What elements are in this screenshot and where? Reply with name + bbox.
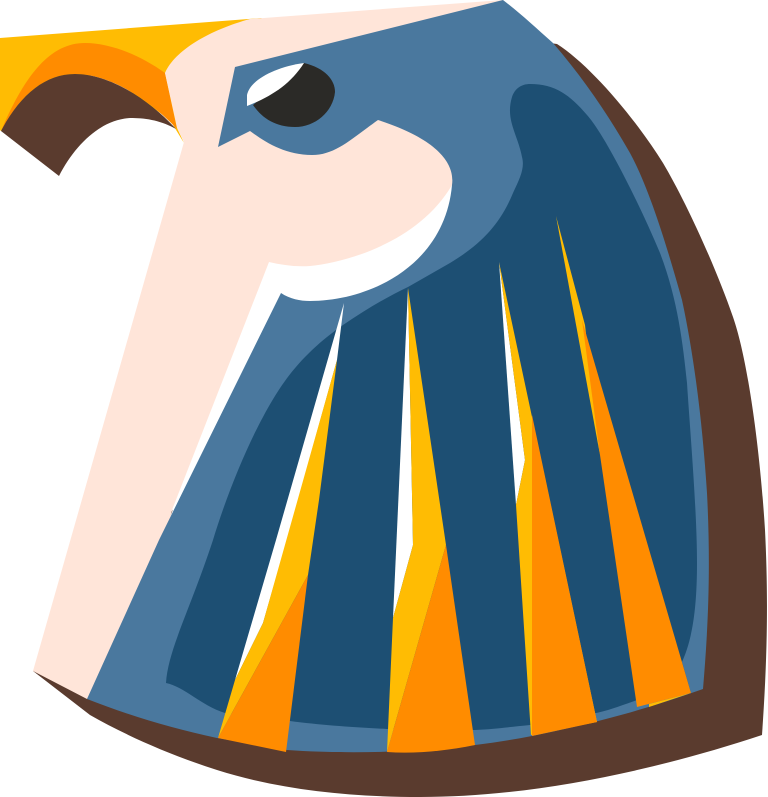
- feather 2 yellow: [387, 288, 446, 752]
- feather 1 yellow: [218, 360, 337, 738]
- feather 4 orange: [582, 320, 691, 707]
- feather 4 yellow: [556, 216, 600, 455]
- feather 3 orange: [532, 415, 597, 736]
- white neck gap: [165, 170, 470, 530]
- peach face: [33, 0, 520, 699]
- eye highlight: [247, 63, 304, 106]
- feather 2 orange: [387, 545, 475, 753]
- beak: [0, 18, 262, 176]
- beak yellow: [0, 18, 262, 143]
- eye pupil: [253, 63, 335, 127]
- blue head: [87, 0, 709, 752]
- feather 3 yellow: [499, 262, 597, 735]
- dark blue feathers: [166, 84, 697, 730]
- feather 2: [387, 288, 475, 753]
- feather 4 yellow tip: [649, 693, 691, 707]
- beak orange: [1, 43, 177, 131]
- feather 1 orange: [218, 575, 308, 752]
- eye: [247, 63, 335, 127]
- feather 4: [556, 216, 691, 707]
- beak brown: [1, 74, 176, 176]
- feather 2 white: [393, 288, 413, 618]
- feather 3: [499, 262, 597, 736]
- feather 1 white: [235, 303, 344, 680]
- feather 3 white: [499, 262, 525, 505]
- feather 1: [218, 303, 344, 752]
